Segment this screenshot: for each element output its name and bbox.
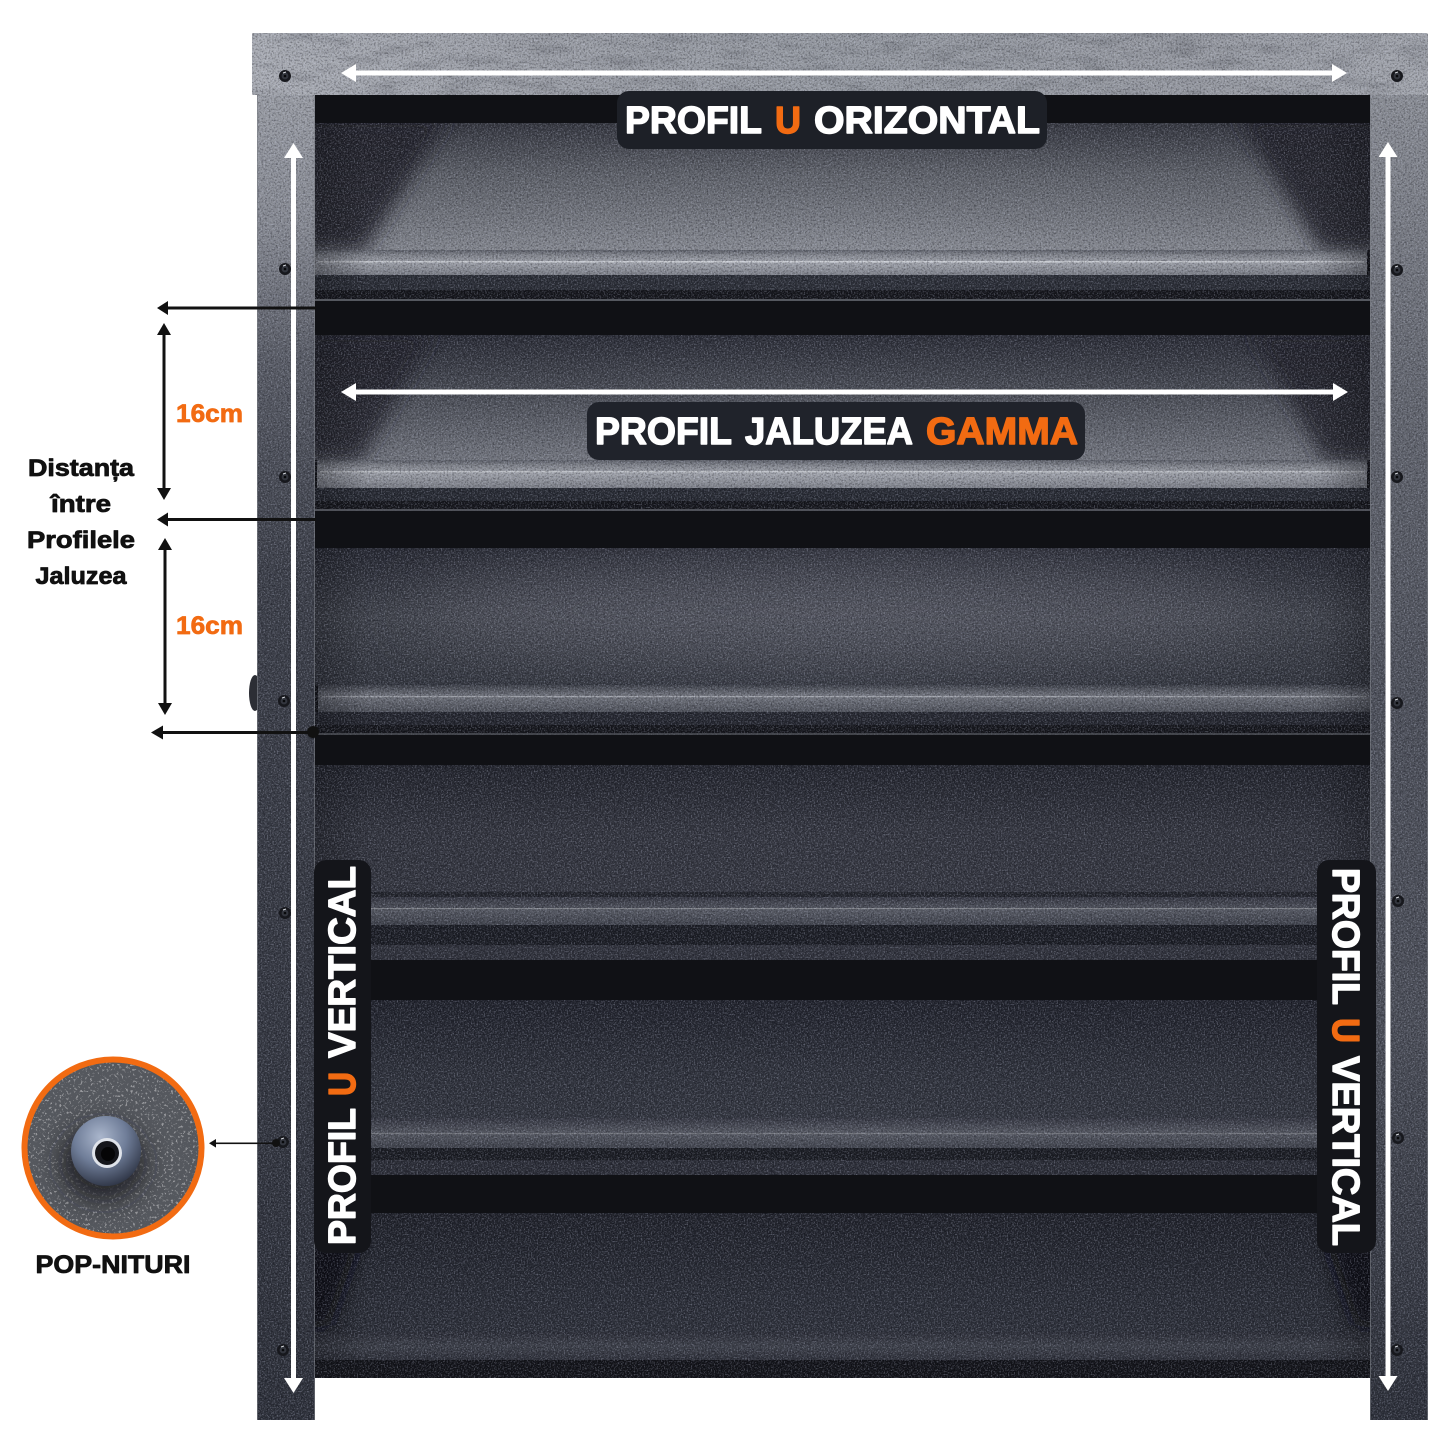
pointer arrow: first profile [157, 301, 316, 315]
interior edge shading [315, 123, 1370, 1363]
dimension arrow: second 16cm [158, 538, 172, 715]
label: PROFIL JALUZEA GAMMA: PROFIL [595, 411, 732, 453]
post outer highlights [258, 95, 1428, 1420]
label: PROFIL JALUZEA GAMMA: GAMMA [926, 411, 1078, 453]
label: PROFIL U VERTICAL right: U [1324, 1018, 1366, 1043]
label: PROFIL U VERTICAL right [1317, 860, 1376, 1253]
slat 3 [315, 548, 1370, 733]
left vertical post [257, 95, 315, 1420]
label: PROFIL U VERTICAL left: VERTICAL [322, 866, 364, 1058]
arrow: right vertical height [1378, 142, 1398, 1391]
top horizontal profile [252, 33, 1428, 95]
dimension label: first 16cm: 16cm [176, 400, 243, 428]
rivets on right post [1391, 70, 1404, 1356]
arrow: louvre profile width [341, 383, 1348, 401]
right vertical post [1370, 95, 1428, 1420]
rivets on left post [277, 70, 291, 1356]
text: distance between louvre profiles: Profilele [27, 527, 135, 554]
label: PROFIL U VERTICAL left: U [322, 1072, 364, 1096]
pointer arrow: second profile [157, 512, 316, 526]
detail circle: pop rivet close-up [22, 1057, 204, 1239]
dark metal texture [252, 33, 1428, 1420]
text: distance between louvre profiles: Distanța [28, 455, 135, 482]
arrow: horizontal top width [341, 64, 1347, 82]
slat 5 [315, 1000, 1370, 1175]
label: PROFIL U VERTICAL right: VERTICAL [1324, 1056, 1366, 1246]
label: PROFIL U ORIZONTAL: U [775, 100, 801, 142]
dimension arrow: first 16cm [157, 323, 171, 500]
label: PROFIL U VERTICAL left [314, 860, 371, 1253]
label: PROFIL U ORIZONTAL [617, 91, 1047, 149]
clean black shadow bands between slats [315, 95, 1370, 1213]
slat 4 [315, 765, 1370, 960]
slat 1 [315, 123, 1370, 290]
label: PROFIL U VERTICAL left: PROFIL [322, 1108, 364, 1245]
mottling on the top profile [252, 33, 1428, 95]
label: PROFIL U ORIZONTAL: PROFIL [625, 100, 762, 142]
pointer arrow: rivet [209, 1139, 280, 1148]
text: distance between louvre profiles: Jaluzea [36, 563, 127, 590]
unit: louvre frame with six slats [249, 33, 1428, 1420]
thin lit edges above the black bands [315, 299, 1370, 735]
slat 2 [315, 335, 1370, 501]
label: PROFIL U ORIZONTAL: ORIZONTAL [814, 100, 1040, 142]
text: distance between louvre profiles: între [50, 491, 111, 518]
label: PROFIL JALUZEA GAMMA: JALUZEA [745, 411, 913, 453]
slat 6 [315, 1213, 1370, 1360]
side bump behind left post [249, 675, 261, 711]
interior [315, 95, 1370, 1378]
label: POP-NITURI: POP-NITURI [36, 1251, 190, 1279]
dimension label: second 16cm: 16cm [176, 612, 243, 640]
light metal texture [252, 33, 1428, 1420]
label: PROFIL U VERTICAL right: PROFIL [1324, 868, 1366, 1005]
text: distance between louvre profiles [27, 455, 135, 590]
pointer arrow: third profile [151, 726, 319, 740]
arrow: left vertical height [284, 143, 303, 1393]
label: PROFIL JALUZEA GAMMA [587, 402, 1085, 460]
